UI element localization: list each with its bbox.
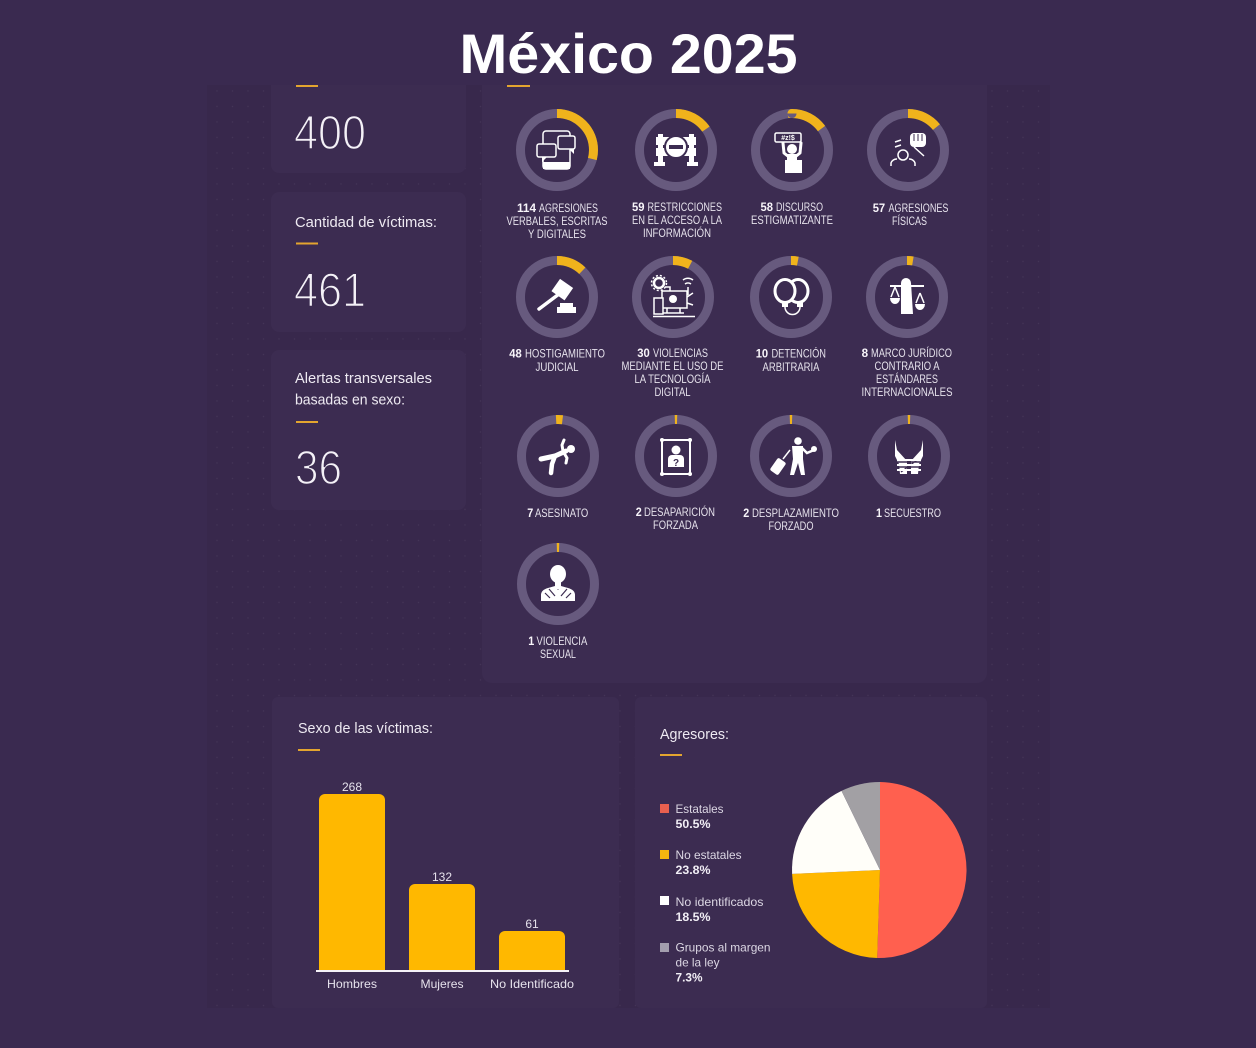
bar: no identificado <box>490 917 574 991</box>
label: SEXUAL <box>540 649 576 661</box>
label <box>862 347 953 399</box>
legend: no estatales: No estatales <box>676 848 742 862</box>
icon: falling person <box>541 440 575 473</box>
number: 461: 461 <box>294 264 366 318</box>
number: 400: 400 <box>294 107 366 160</box>
item: agresiones verbales <box>506 114 608 241</box>
label: VERBALES, ESCRITAS <box>506 216 608 228</box>
panel: victims count <box>271 192 466 332</box>
label: AGRESIONES <box>539 203 598 215</box>
bar: hombres: Hombres <box>327 977 377 991</box>
label: 48 <box>509 348 522 360</box>
item: desaparicion forzada <box>636 418 715 532</box>
label: VIOLENCIA <box>536 636 588 648</box>
label: CONTRARIO A <box>874 361 940 373</box>
label: INFORMACIÓN <box>643 227 711 240</box>
label <box>873 203 949 228</box>
number: 36: 36 <box>295 442 342 495</box>
label: Y DIGITALES <box>528 229 586 241</box>
label <box>756 348 826 374</box>
label: ESTÁNDARES <box>876 373 938 386</box>
label: 2 <box>636 507 642 519</box>
label: DETENCIÓN <box>772 348 826 360</box>
label: 57 <box>873 203 885 215</box>
heading: cantidad de victimas: Cantidad de víctimas: <box>295 214 437 231</box>
item: asesinato <box>520 418 596 520</box>
label: 59 <box>632 202 644 214</box>
label: 7 <box>527 508 533 520</box>
icon: traveler with luggage <box>770 437 817 476</box>
heading: agresores: Agresores: <box>660 726 729 743</box>
item: restricciones <box>632 114 722 240</box>
label: SECUESTRO <box>884 508 941 520</box>
item: violencias tecnologia <box>622 260 724 399</box>
label: FORZADO <box>768 521 814 533</box>
icon: tied hands <box>895 440 923 474</box>
bar: no identificado: 61 <box>525 917 539 931</box>
label: 10 <box>756 348 768 360</box>
legend: grupos al margen: de la ley <box>676 956 720 970</box>
item: secuestro <box>871 418 947 520</box>
label <box>751 202 833 227</box>
label: 114 <box>517 203 537 215</box>
bar: hombres: 268 <box>342 780 362 794</box>
panel: aggressors <box>635 697 987 1008</box>
bar: no identificado: No Identificado <box>490 977 574 991</box>
label: MARCO JURÍDICO <box>871 347 952 360</box>
panel: total alerts <box>271 85 466 173</box>
bar: mujeres <box>409 870 475 991</box>
icon: phone with chat bubbles <box>537 131 575 169</box>
icon: barrier with no-entry sign <box>654 134 698 166</box>
label: 2 <box>743 508 749 520</box>
legend: no identificados: 18.5% <box>676 910 711 924</box>
label: ARBITRARIA <box>762 362 820 374</box>
label: FÍSICAS <box>892 215 927 228</box>
icon: hand holding scales <box>890 278 925 314</box>
item: desplazamiento forzado <box>743 418 839 533</box>
label: 30 <box>637 348 650 360</box>
label: HOSTIGAMIENTO <box>525 348 605 360</box>
label: RESTRICCIONES <box>648 202 722 214</box>
label <box>636 506 715 532</box>
legend: no estatales <box>660 848 742 877</box>
legend: grupos al margen: 7.3% <box>676 970 703 984</box>
item: detencion arbitraria <box>754 260 828 374</box>
bar: hombres <box>319 780 385 991</box>
panel: cross-cutting alerts <box>271 350 466 510</box>
icon: handcuffs <box>775 280 808 314</box>
panel: sex of victims <box>272 697 619 1008</box>
label: VIOLENCIAS <box>653 348 708 360</box>
label: DIGITAL <box>654 387 691 399</box>
label <box>506 203 608 241</box>
bar: mujeres: Mujeres <box>420 977 464 991</box>
label: DISCURSO <box>776 202 823 214</box>
label <box>632 202 722 240</box>
icon: person silhouette <box>541 565 575 601</box>
legend <box>660 802 770 984</box>
legend: estatales: Estatales <box>676 802 724 816</box>
panel: alert types <box>482 85 987 683</box>
icon: fist and person <box>891 133 926 166</box>
legend: no identificados: No identificados <box>676 895 764 909</box>
legend: no identificados <box>660 895 764 924</box>
bar chart <box>316 780 574 991</box>
label: 1 <box>876 508 883 520</box>
legend: grupos al margen: Grupos al margen <box>676 940 770 954</box>
legend: grupos al margen <box>660 940 770 984</box>
label: JUDICIAL <box>536 362 579 374</box>
label: 58 <box>760 202 774 214</box>
legend: no estatales: 23.8% <box>676 863 711 877</box>
bar: mujeres: 132 <box>432 870 452 884</box>
icon: computer, gear and wifi <box>652 276 695 316</box>
title: México 2025 <box>460 22 798 85</box>
label <box>509 348 605 374</box>
item: agresiones fisicas <box>872 114 949 228</box>
label: DESAPARICIÓN <box>644 506 715 519</box>
label <box>528 636 588 661</box>
background panel <box>207 85 1050 1008</box>
item: violencia sexual <box>520 546 596 661</box>
heading: sexo de las victimas: Sexo de las víctimas: <box>298 720 433 737</box>
heading: alertas transversales: Alertas transversales <box>295 370 432 387</box>
label <box>743 508 839 533</box>
label: 8 <box>862 348 869 360</box>
icon: framed missing person: ? <box>673 458 679 469</box>
legend: estatales <box>660 802 724 831</box>
item: hostigamiento judicial <box>509 260 605 374</box>
label <box>622 348 724 399</box>
item: discurso estigmatizante <box>751 114 833 227</box>
label: LA TECNOLOGÍA <box>634 373 711 386</box>
label: EN EL ACCESO A LA <box>632 215 722 227</box>
icon: gavel <box>539 279 576 313</box>
heading: alertas transversales <box>295 370 432 408</box>
label: ESTIGMATIZANTE <box>751 215 833 227</box>
pie chart <box>792 782 967 958</box>
heading: alertas transversales: basadas en sexo: <box>295 392 405 408</box>
label: DESPLAZAMIENTO <box>752 508 839 520</box>
label: MEDIANTE EL USO DE <box>622 361 724 373</box>
legend: estatales: 50.5% <box>676 817 711 831</box>
item: marco juridico <box>862 260 953 399</box>
label: 1 <box>528 636 535 648</box>
label: INTERNACIONALES <box>862 387 953 399</box>
icon: speaker at podium: #z!$ <box>781 135 795 142</box>
label: AGRESIONES <box>888 203 949 215</box>
label: FORZADA <box>653 520 698 532</box>
label: ASESINATO <box>535 508 588 520</box>
